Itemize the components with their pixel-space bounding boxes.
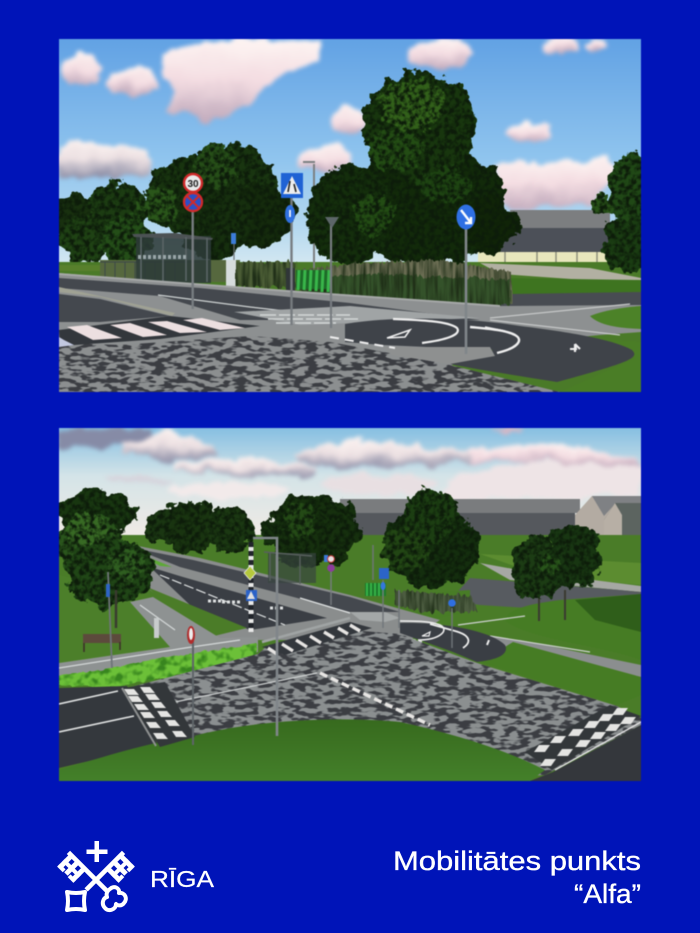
left pole sign [106,572,112,668]
far background ground [59,262,641,392]
paving stones [59,336,560,392]
sign: yield back [325,217,339,328]
shelter [264,552,316,584]
bottom grass mound [59,719,545,781]
right large lawn [504,594,641,660]
centre tree [381,489,478,588]
near crossing band [59,316,260,346]
photo: mobility point street view [58,38,642,393]
road sign cluster [324,555,335,605]
parking sign and ticket machine [226,233,236,287]
right trees [510,523,602,598]
road markings [330,304,630,353]
fence and low planting [59,260,240,282]
lawn [480,642,641,705]
sky [59,39,641,274]
reeds [395,590,478,612]
bicycle shelter [132,233,213,283]
title: Mobilitātes punkts [393,846,641,876]
raised kerb centre [383,347,495,364]
junction asphalt [345,318,634,382]
junction markings [400,621,489,648]
clouds [59,427,641,500]
green bicycle racks [286,268,330,292]
bright grass strip [143,555,172,567]
pedestrian crossing [262,612,400,655]
sign: speed limit and no stopping [184,174,202,309]
ground [59,535,641,781]
clouds [59,38,615,210]
sign: speed limit and no stopping: 30 [187,179,199,190]
footpath [59,597,258,680]
green bicycle racks [365,583,386,596]
sign: keep right [456,204,476,354]
large tree [306,71,518,265]
traffic mirror [187,626,195,745]
logo: Riga crossed keys [57,841,135,912]
bottom asphalt right [530,725,641,781]
far fields and path [380,554,641,625]
traffic island kerb [59,287,175,316]
reed planting [236,260,512,307]
far building [478,210,628,268]
shaded lawn [575,594,641,632]
paving stones [127,630,641,781]
far pedestrian crossing [234,306,480,325]
street lamp [253,538,277,736]
bush hedge [59,644,257,687]
blue crossing sign [373,545,399,628]
lower road [59,294,170,322]
checker crossing left [122,682,195,747]
sky [59,428,641,548]
square key bow [67,892,85,910]
cross [86,841,108,862]
tree trunk [115,590,117,628]
bottom asphalt left [59,686,158,768]
pavement base [59,273,641,366]
grey ground between roads [133,545,440,640]
right lower grass [560,340,641,392]
key right with bit [84,851,136,903]
path bollard [154,618,159,638]
right tree [595,154,656,273]
paving line [170,673,317,703]
grass verge [147,587,247,637]
right tree trunks [539,590,565,621]
pedestrian crossing stripes [59,318,245,347]
far left trees [50,182,151,266]
title [393,846,641,909]
road centre line [158,295,330,316]
checker crossing right [525,705,641,770]
buildings [340,496,641,563]
tree behind shelter [142,143,294,260]
road lines [160,575,350,625]
paving dashes [320,673,430,725]
photo: mobility point aerial view [58,427,642,782]
beacon column [244,542,257,632]
bench [83,634,121,652]
key left with bit [56,851,110,905]
title: “Alfa” [574,879,641,909]
clover key bow [103,887,126,910]
street lamp [303,162,315,268]
lower road [150,567,327,630]
upper road [59,278,480,320]
left tree [58,512,154,606]
grey kerb path [440,634,641,677]
right grass island [590,306,641,329]
left grass lawn [59,575,175,665]
sign: pedestrian crossing [281,173,303,325]
upper road [133,548,400,612]
blue oval sign [448,599,456,648]
background trees [58,490,360,566]
parking lines [59,691,134,732]
junction asphalt [400,623,506,662]
